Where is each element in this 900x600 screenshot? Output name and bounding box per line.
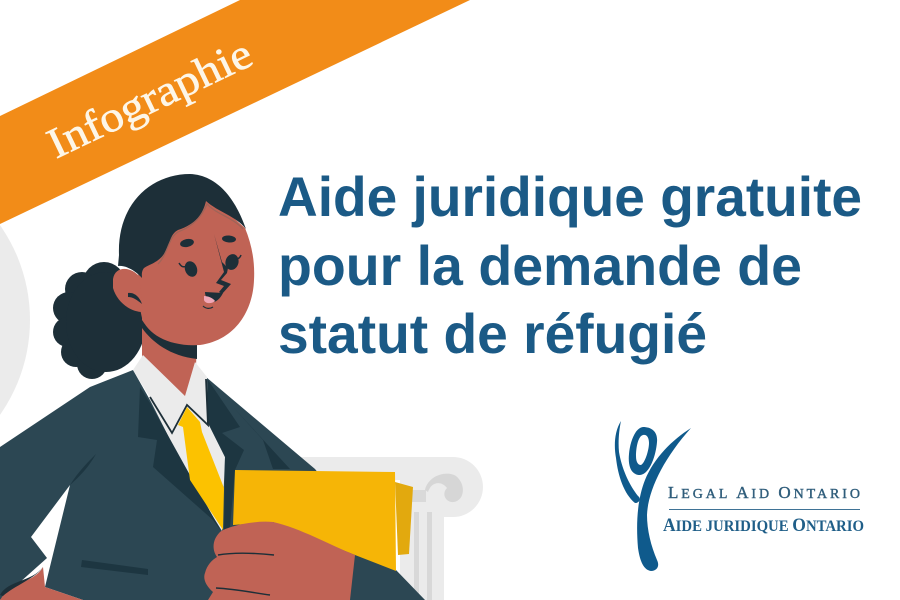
mouth bbox=[205, 292, 223, 302]
hairline highlight bbox=[158, 204, 243, 264]
right hand bbox=[204, 522, 355, 600]
hair top bbox=[118, 174, 246, 278]
lower lip line bbox=[203, 306, 213, 308]
folder tab bbox=[395, 482, 413, 555]
ear bbox=[113, 269, 143, 312]
lapel right bbox=[206, 377, 244, 531]
tongue bbox=[204, 296, 215, 303]
pocket bbox=[81, 560, 148, 575]
title: Aide juridique gratuite bbox=[278, 165, 862, 228]
title: statut de réfugié bbox=[278, 302, 707, 365]
shirt collar bbox=[133, 355, 208, 433]
neck bbox=[142, 310, 197, 398]
left hand bbox=[0, 567, 83, 600]
eyelashes bbox=[179, 255, 241, 267]
logo divider bbox=[669, 509, 860, 510]
lapel left bbox=[138, 387, 221, 531]
tie bbox=[178, 407, 224, 530]
collar lines bbox=[150, 379, 208, 433]
illustration: column bbox=[300, 457, 483, 600]
title: pour la demande de bbox=[278, 234, 802, 297]
logo English name: LEGAL AID ONTARIO bbox=[668, 483, 860, 502]
shirt bbox=[150, 400, 225, 530]
neck shadow bbox=[142, 320, 197, 359]
banner label: Infographie bbox=[40, 30, 260, 168]
logo French name: AIDE JURIDIQUE ONTARIO bbox=[663, 515, 864, 536]
logo bbox=[615, 421, 864, 571]
logo figure bbox=[615, 421, 691, 571]
left hand edge bbox=[0, 567, 43, 596]
sleeve crease bbox=[70, 454, 96, 485]
banner: orange ribbon bbox=[0, 0, 470, 224]
background circle bbox=[0, 155, 30, 485]
nose and mouth line bbox=[214, 234, 231, 294]
hair bun bbox=[53, 262, 146, 379]
jacket bbox=[0, 370, 425, 600]
eyebrows bbox=[179, 238, 195, 248]
title bbox=[278, 165, 862, 365]
eyes bbox=[183, 259, 199, 279]
ear detail bbox=[128, 293, 142, 304]
finger lines bbox=[216, 553, 274, 595]
face bbox=[138, 195, 254, 345]
illustration: woman bbox=[0, 174, 425, 600]
folder bbox=[233, 470, 396, 571]
jacket fold bbox=[233, 407, 290, 469]
